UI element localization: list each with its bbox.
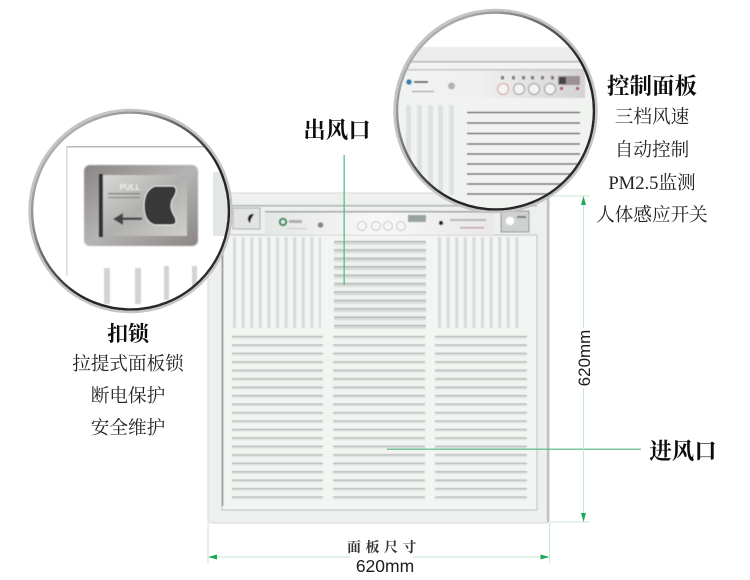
vertical slats [406, 105, 454, 195]
text: control panel features: 三档风速 [615, 107, 690, 128]
text: lock features: 断电保护 [91, 386, 165, 407]
logo [406, 79, 412, 85]
pull recess [144, 186, 176, 225]
label: panel size: 面板尺寸 [347, 539, 421, 556]
lock right small [501, 211, 529, 232]
panel logo [280, 219, 307, 229]
heading: inlet: 进风口 [649, 439, 717, 464]
lock plate [84, 165, 198, 246]
slats [104, 266, 197, 304]
air purifier panel [208, 193, 549, 523]
lock left small [233, 208, 260, 229]
text: control panel features [596, 107, 708, 226]
magnifier: lock: PULL [120, 183, 141, 192]
outlet grille [233, 237, 321, 328]
text: lock features: 拉提式面板锁 [72, 354, 184, 375]
heading: lock: 扣锁 [107, 322, 150, 346]
panel buttons [358, 222, 406, 230]
label: 620mm: 620mm [356, 556, 414, 576]
heading: outlet: 出风口 [303, 118, 371, 143]
text: control panel features: 人体感应开关 [596, 205, 708, 226]
control buttons [498, 84, 556, 94]
text: lock features: 安全维护 [91, 418, 165, 439]
horizontal slats [467, 112, 580, 194]
text: control panel features: 自动控制 [615, 140, 689, 161]
text: control panel features: PM2.5监测 [608, 173, 696, 194]
text: lock features [72, 354, 184, 439]
magnifier: control panel [394, 10, 600, 217]
dimension width [208, 523, 550, 576]
control strip [265, 212, 494, 235]
callout lines [344, 155, 641, 450]
magnifier: lock [30, 110, 233, 314]
arrow [113, 213, 142, 225]
dimension height [550, 196, 594, 522]
outer frame [208, 193, 549, 523]
heading: control panel: 控制面板 [607, 74, 697, 99]
panel display [408, 215, 426, 222]
label: 620mm vertical: 620mm [575, 330, 594, 386]
inlet grille [232, 336, 323, 500]
